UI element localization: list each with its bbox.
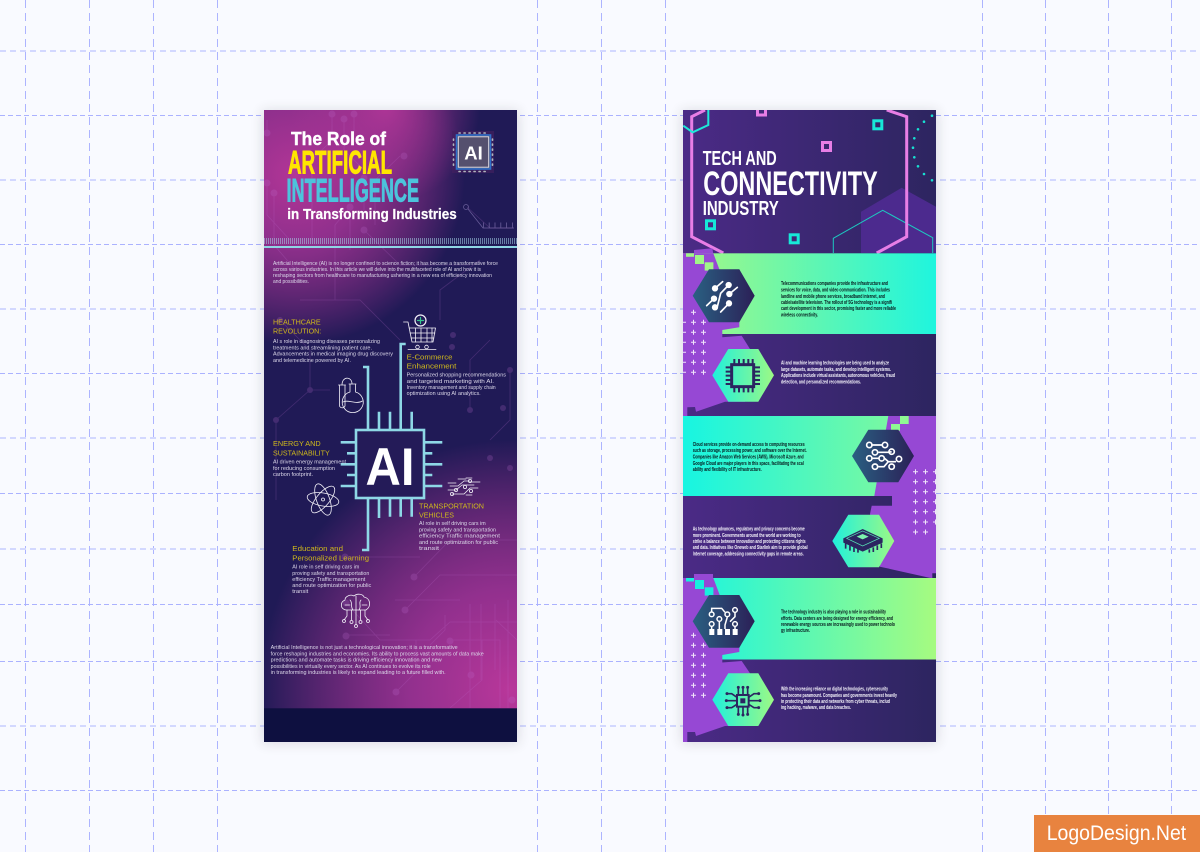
hexagon icon: circuit nodes (852, 430, 914, 482)
text block: e-commerce: and targeted marketing with AI. (407, 379, 494, 385)
text block: education: Personalized Learning (292, 553, 369, 562)
text block: energy and sustainability: for reducing consumption (273, 466, 335, 472)
decorative hexagon, lower right (833, 188, 936, 253)
title: The Role of (291, 129, 387, 149)
band 5: sustainability (683, 578, 936, 660)
text block: transportation vehicles: efficiency Traffic management (419, 534, 501, 540)
intro text: Artificial Intelligence (AI) is no longer confined to science fiction; it has become a transformative force (273, 261, 498, 267)
text block: education: AI role in self driving cars im (292, 564, 359, 570)
hexagon icon: chip with traces (712, 673, 774, 726)
text block: energy and sustainability: ENERGY AND (273, 439, 321, 448)
text block: education: Education and (292, 544, 343, 553)
band 6: cybersecurity: has become paramount. Companies and governments invest heavily (781, 693, 897, 699)
text block: transportation vehicles: VEHICLES (419, 511, 454, 520)
band 2: AI and machine learning (683, 334, 936, 416)
intro text (273, 261, 498, 285)
panel: role of artificial intelligence (264, 110, 517, 742)
intro text: across various industries. In this article we will delve into the multifaceted role of AI and how it is (273, 267, 481, 273)
chip label: AI (366, 438, 414, 497)
conclusion text: predictions and automate tasks is driving efficiency innovation and new (271, 658, 442, 664)
band 2: AI and machine learning: detection, and personalized recommendations. (781, 380, 861, 386)
band 6: cybersecurity: ing hacking, malware, and data breaches. (781, 705, 851, 711)
band 4: regulation and privacy: more prominent. Governments around the world are working to (693, 533, 801, 539)
icon: shopping cart with medical cross (404, 315, 436, 350)
text block: healthcare (273, 317, 394, 364)
title: in Transforming Industries (287, 207, 457, 223)
footer band (264, 708, 517, 742)
text block: energy and sustainability (273, 439, 347, 478)
plus grid, third block (691, 633, 706, 698)
intro text: reshaping sectors from healthcare to manufacturing ushering in a new era of efficiency innovation (273, 273, 492, 279)
panel: tech and connectivity industry (681, 106, 938, 742)
hexagon icon: processor chip (712, 349, 774, 402)
band 3: cloud services: Cloud services provide on-demand access to computing resources (693, 442, 805, 448)
barcode stripe and divider (264, 241, 517, 248)
header background (683, 110, 936, 254)
icon: AI chip badge: AI (464, 142, 483, 164)
band 5: sustainability: renewable energy sources are increasingly used to power technolo (781, 622, 895, 628)
band 2: AI and machine learning: large datasets, automate tasks, and develop intelligent systems. (781, 367, 891, 373)
heading (702, 151, 878, 215)
band 2: AI and machine learning: Applications include virtual assistants, autonomous vehicles, fraud (781, 373, 895, 379)
conclusion text (271, 645, 484, 676)
conclusion text: force reshaping industries and economies. Its ability to process vast amounts of data make (271, 652, 484, 658)
heading: CONNECTIVITY (703, 165, 878, 203)
text block: healthcare: HEALTHCARE (273, 317, 321, 326)
text block: transportation vehicles: TRANSPORTATION (419, 502, 484, 511)
band 6: cybersecurity: in protecting their data and networks from cyber threats, includ (781, 699, 890, 705)
decorative squares (706, 106, 882, 243)
band 2: AI and machine learning: AI and machine learning technologies are being used to analyze (781, 360, 889, 366)
band 4: regulation and privacy: As technology advances, regulatory and privacy concerns become (693, 526, 805, 532)
text block: e-commerce: Inventory management and supply chain (407, 385, 496, 391)
icon: atom (306, 482, 340, 517)
circuit accent, top right (464, 204, 514, 228)
intro text: and possibilities. (273, 279, 309, 285)
band 3: cloud services (683, 416, 936, 496)
text block: transportation vehicles: proving safety and transportation (419, 528, 496, 534)
band 1: telecommunications: landline and mobile phone services, broadband internet, and (781, 294, 885, 300)
band 1: telecommunications: services for voice, data, and video communication. This includes (781, 288, 890, 294)
text block: transportation vehicles: AI role in self driving cars im (419, 521, 486, 527)
plus grid, second block (913, 469, 938, 534)
icon: circuit nodes (448, 478, 480, 496)
band 5: sustainability: efforts. Data centers are being designed for energy efficiency, and (781, 616, 893, 622)
band 1: telecommunications: wireless connectivity. (780, 312, 818, 318)
text block: transportation vehicles (419, 502, 501, 552)
band 5: sustainability: The technology industry is also playing a role in sustainability (781, 610, 886, 616)
chip pins and connectors (341, 344, 442, 550)
text block: education (292, 544, 372, 595)
text block: healthcare: treatments and streamlining patient care. (273, 345, 372, 351)
text block: education: proving safety and transportation (292, 571, 370, 577)
band 5: sustainability: gy infrastructure. (781, 628, 810, 634)
text block: education: transit (292, 589, 309, 595)
title: ARTIFICIAL (288, 144, 392, 180)
band 4: regulation and privacy (683, 496, 936, 578)
conclusion text: in transforming industries is likely to expand leading to a future filled with. (271, 670, 446, 676)
text block: education: efficiency Traffic management (292, 577, 366, 583)
text block: energy and sustainability: AI driven energy management (273, 460, 347, 466)
text block: healthcare: Advancements in medical imaging drug discovery (273, 352, 394, 358)
icon: laboratory flask (338, 378, 363, 413)
heading: TECH AND (703, 148, 777, 170)
icon: AI chip badge (452, 131, 494, 173)
chip body (356, 430, 424, 498)
band 3: cloud services: Companies like Amazon Web Services (AWS), Microsoft Azure, and (693, 454, 804, 460)
AI chip diagram (341, 344, 442, 550)
hexagon icon: isometric chip (832, 515, 894, 567)
band 3: cloud services: such as storage, processing power, and software over the Internet. (693, 448, 807, 454)
hexagon icon: circuit board connectors (693, 595, 755, 648)
text block: e-commerce: E-Commerce (407, 352, 452, 361)
band 3: cloud services: ability and flexibility of IT infrastructure. (693, 467, 762, 473)
band 3: cloud services: Google Cloud are major players in this space, facilitating the scal (693, 461, 804, 467)
purple accent, header bottom (694, 248, 713, 254)
band 6: cybersecurity (683, 660, 936, 742)
plus grid, first block (681, 310, 706, 375)
text block: e-commerce: Enhancement (407, 361, 456, 370)
text block: e-commerce (407, 352, 507, 397)
band 4: regulation and privacy: and data. Initiatives like Oneweb and Starlink aim to provide global (693, 545, 808, 551)
title: INTELLIGENCE (286, 173, 419, 209)
dotted arc (912, 114, 933, 182)
band 1: telecommunications: cant development in this sector, promising faster and more reliable (781, 306, 896, 312)
text block: healthcare: REVOLUTION: (273, 326, 321, 335)
icon: brain with circuits (341, 594, 370, 628)
band 4: regulation and privacy: strike a balance between innovation and protecting citizens rights (693, 539, 806, 545)
text block: healthcare: and telemedicine powered by AI. (273, 358, 351, 364)
circuit background traces (264, 110, 517, 708)
text block: healthcare: AI s role in diagnosing diseases personalizing (273, 339, 380, 345)
watermark badge: LogoDesign.Net (1047, 822, 1186, 845)
conclusion text: Artificial Intelligence is not just a technological innovation; it is a transformative (271, 645, 458, 651)
band 6: cybersecurity: With the increasing reliance on digital technologies, cybersecurity (781, 686, 888, 692)
band 4: regulation and privacy: Internet coverage, addressing connectivity gaps in remote areas. (693, 552, 804, 558)
band 1: telecommunications (683, 253, 936, 334)
watermark badge (1034, 815, 1200, 852)
conclusion text: possibilities in virtually every sector. As AI continues to evolve its role (271, 664, 431, 670)
panel shadows (262, 110, 938, 744)
heading: INDUSTRY (703, 198, 779, 220)
text block: education: and route optimization for public (292, 583, 372, 589)
text block: e-commerce: optimization using AI analytics. (407, 391, 481, 397)
title (286, 129, 457, 223)
hexagon icon: circuit lines (693, 269, 755, 322)
band 1: telecommunications: Telecommunications companies provide the infrastructure and (781, 281, 888, 287)
text block: transportation vehicles: and route optimization for public (419, 540, 499, 546)
teal hexagon fragment (683, 110, 708, 132)
text block: energy and sustainability: carbon footprint. (273, 472, 313, 478)
text block: transportation vehicles: transit (419, 546, 440, 552)
text block: e-commerce: Personalized shopping recommendations (407, 372, 507, 378)
text block: energy and sustainability: SUSTAINABILITY (273, 448, 330, 457)
pink hexagon frame (692, 110, 907, 253)
band 1: telecommunications: cable/satellite television. The rollout of 5G technology is a signifi (781, 300, 892, 306)
